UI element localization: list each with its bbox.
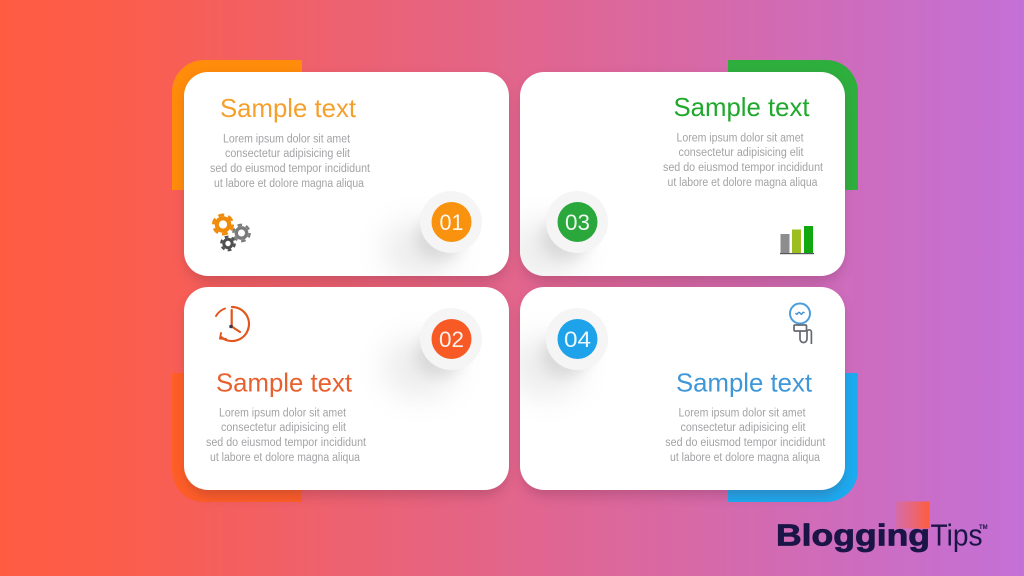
logo: BloggingTips: Tips	[930, 518, 982, 552]
body text 03: sed do eiusmod tempor incididunt	[663, 162, 824, 174]
heading 03: Sample text	[674, 92, 810, 122]
accent corner: blue	[728, 373, 858, 502]
accent corner: green	[728, 60, 858, 190]
body text 02: ut labore et dolore magna aliqua	[210, 452, 361, 464]
heading 04: Sample text	[676, 368, 813, 398]
body text 03: ut labore et dolore magna aliqua	[668, 177, 818, 189]
number badge 04: 04	[564, 327, 591, 352]
body text 01	[210, 134, 371, 190]
accent corner: red-orange	[172, 373, 302, 502]
heading 01: Sample text	[220, 93, 357, 123]
body text 01: ut labore et dolore magna aliqua	[214, 178, 365, 190]
logo: BloggingTips	[776, 502, 988, 552]
body text 02: sed do eiusmod tempor incididunt	[206, 437, 367, 449]
body text 04: consectetur adipisicing elit	[680, 422, 806, 434]
number badge 03	[520, 191, 608, 276]
body text 01: consectetur adipisicing elit	[225, 148, 351, 160]
number badge 02	[384, 308, 482, 397]
icon: gears	[213, 215, 250, 250]
number badge 04	[520, 308, 608, 397]
panel: card 01	[184, 72, 509, 282]
trademark: TM	[979, 525, 988, 531]
heading 02: Sample text	[216, 368, 353, 398]
panel: card 03	[510, 72, 845, 282]
number badge 01	[384, 191, 482, 280]
body text 04	[665, 408, 826, 464]
body text 03: Lorem ipsum dolor sit amet	[676, 132, 804, 144]
number badge 03: 03	[565, 210, 590, 235]
body text 01: sed do eiusmod tempor incididunt	[210, 163, 371, 175]
panel: card 02	[184, 287, 509, 496]
accent corner: orange	[172, 60, 302, 190]
body text 03: consectetur adipisicing elit	[678, 147, 804, 159]
body text 04: ut labore et dolore magna aliqua	[670, 452, 821, 464]
icon: light bulb	[790, 304, 811, 344]
body text 01: Lorem ipsum dolor sit amet	[223, 134, 351, 146]
number badge 02: 02	[439, 327, 464, 352]
logo square	[895, 502, 930, 528]
body text 04: Lorem ipsum dolor sit amet	[678, 408, 806, 420]
body text 04: sed do eiusmod tempor incididunt	[665, 437, 826, 449]
body text 02: consectetur adipisicing elit	[221, 422, 347, 434]
logo wordmark: Blogging	[776, 518, 930, 552]
icon: clock	[216, 307, 249, 341]
icon: bar chart	[780, 226, 814, 254]
panel: card 04	[510, 287, 845, 496]
body text 02	[206, 408, 367, 464]
body text 02: Lorem ipsum dolor sit amet	[219, 408, 347, 420]
body text 03	[663, 132, 824, 189]
number badge 01: 01	[440, 210, 464, 235]
